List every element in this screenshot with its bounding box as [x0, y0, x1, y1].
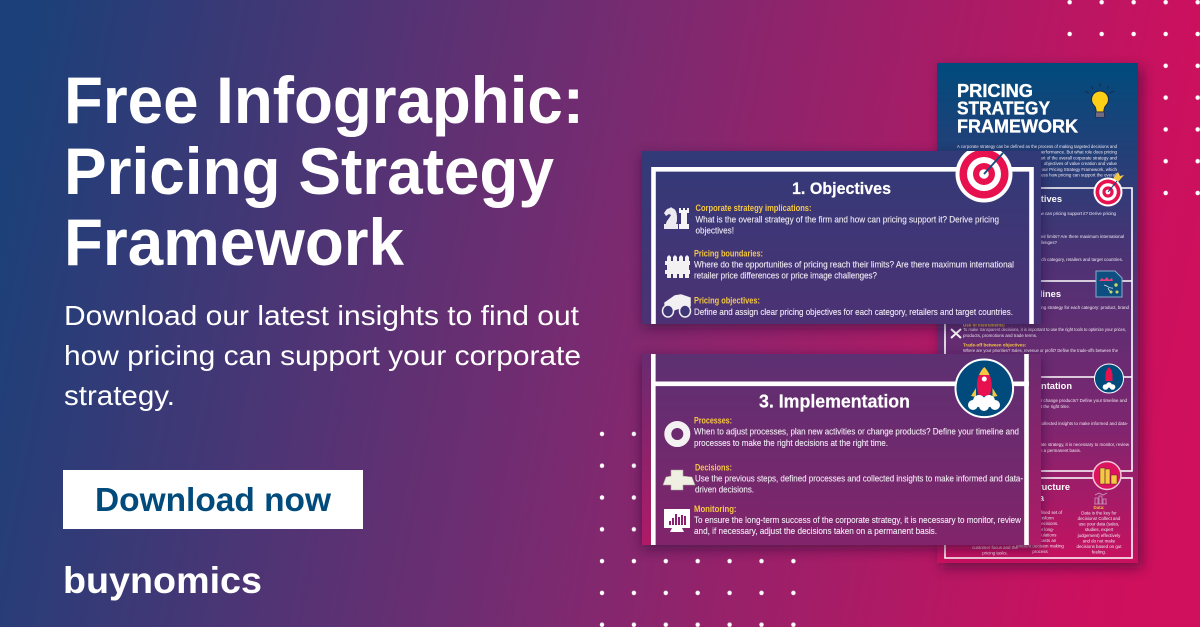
- column: data: Data:: [1094, 505, 1105, 510]
- column: customer: customer focus and the: [972, 545, 1018, 550]
- column: data: use your data (sales,: [1079, 522, 1119, 527]
- column: KPIs: Short- or long-: [1026, 527, 1055, 532]
- column: customer: pricing tasks.: [982, 550, 1008, 556]
- document title: PRICING: [957, 80, 1033, 101]
- section text in document: products, promotions and trade terms.: [963, 333, 1037, 338]
- item: decisions: driven decisions.: [695, 484, 754, 494]
- main heading: Free Infographic:: [64, 63, 584, 137]
- item: pricing objectives: [694, 296, 1013, 317]
- section text in document: To make transparent decisions, it is important to use the right tools to optimize your prices,: [963, 327, 1126, 332]
- section text in document: relevant KPIs.: [963, 354, 990, 359]
- section headings in document: Infrastructure: [1010, 482, 1070, 492]
- section headings in document: [1003, 194, 1072, 503]
- column: data: judgement) effectively: [1077, 533, 1121, 538]
- item: pricing boundaries: Pricing boundaries:: [694, 249, 763, 259]
- column: data: [1077, 505, 1122, 555]
- section text in document: of the corporate strategy, it is necessary to monitor, review: [1016, 442, 1130, 447]
- column: data: Data is the key for: [1081, 510, 1117, 516]
- column: KPIs: efficient decision making: [1016, 544, 1064, 549]
- item: processes: Processes:: [694, 416, 732, 426]
- main heading: [64, 63, 584, 279]
- main heading: Pricing Strategy: [64, 134, 554, 208]
- intro paragraph: ess how pricing can support the overall: [1041, 172, 1117, 178]
- document frame: [945, 188, 1132, 558]
- icon: small target: [1094, 172, 1124, 206]
- icon: map: [1096, 271, 1122, 297]
- icon: chess pieces: [664, 207, 689, 229]
- item: decisions: Decisions:: [695, 462, 732, 472]
- tools icon in document: [951, 329, 961, 338]
- icon: target: [956, 146, 1012, 202]
- tall infographic document: [937, 63, 1142, 568]
- download button: Download now: [95, 481, 331, 518]
- sub-heading text: how pricing can support your corporate: [64, 340, 581, 371]
- yellow sublabels in document: [963, 322, 1027, 348]
- item: decisions: [695, 462, 1023, 494]
- icon: fence: [665, 255, 690, 278]
- section text in document: plan new activities or change products? Define your timeline and: [1002, 398, 1128, 403]
- icon: monitor chart: [664, 509, 690, 532]
- intro paragraph: performance. But what role does pricing: [1039, 150, 1118, 155]
- panel frame: [651, 354, 1029, 545]
- item: monitoring: To ensure the long-term success of the corporate strategy, it is necessary to monitor, review: [694, 515, 1021, 525]
- item: corporate strategy: What is the overall strategy of the firm and how can pricing support it? Derive pricing: [696, 214, 999, 224]
- intro paragraph: [957, 144, 1118, 178]
- icon: small rocket: [1094, 364, 1124, 393]
- icon: binoculars: [662, 295, 690, 317]
- item: processes: processes to make the right decisions at the right time.: [694, 438, 888, 448]
- icon: rocket: [956, 360, 1013, 417]
- icon: data chart: [1094, 493, 1107, 504]
- icon: process ring: [668, 424, 687, 444]
- item: monitoring: and, if necessary, adjust the decisions taken on a permanent basis.: [694, 526, 937, 536]
- intro paragraph: objectives of value creation and value: [1044, 161, 1118, 166]
- section headings in document: Implementation: [1003, 381, 1072, 391]
- column: data: feeling.: [1092, 550, 1106, 555]
- icon: road crossing: [663, 470, 695, 490]
- dot pattern: top right: [1054, 0, 1200, 209]
- section headings in document: Objectives: [1015, 194, 1062, 204]
- column: KPIs: [1016, 510, 1064, 554]
- column: KPIs: and forecasts an: [1024, 538, 1057, 543]
- sub-heading text: strategy.: [64, 380, 175, 411]
- item: corporate strategy: [696, 203, 999, 235]
- sub-heading text: Download our latest insights to find out: [64, 300, 579, 331]
- column: data: and do not make: [1083, 538, 1116, 543]
- column: KPIs: KPIs to inform: [1026, 516, 1054, 521]
- section headings in document: & Data: [1015, 493, 1045, 503]
- section text in document: the decisions on a permanent basis.: [1011, 448, 1081, 453]
- section text in document: challenges?: [1034, 240, 1058, 245]
- item: corporate strategy: Corporate strategy implications:: [696, 203, 812, 213]
- section text in document: What is the overall strategy and how can pricing support it? Derive pricing: [973, 211, 1117, 216]
- section text in document: defined processes and collected insights to make informed and data-: [994, 421, 1129, 426]
- item: pricing boundaries: retailer price differences or price image challenges?: [694, 271, 877, 281]
- column: data: studies, expert: [1085, 527, 1114, 532]
- section text in document: reach their limits? Are there maximum international: [1025, 234, 1124, 239]
- column: KPIs: process: [1032, 549, 1048, 554]
- item: pricing objectives: Pricing objectives:: [694, 296, 760, 306]
- section text in document: [963, 211, 1130, 453]
- panel: 3. Implementation: [642, 354, 1041, 549]
- panel frame: [654, 169, 1032, 324]
- column: KPIs: term calculations: [1024, 532, 1057, 537]
- item: pricing objectives: Define and assign clear pricing objectives for each category, retailers and target countries.: [694, 307, 1013, 317]
- buynomics logo: buynomics: [63, 560, 262, 601]
- section text in document: the pricing strategy for each category: product, brand: [1026, 305, 1130, 310]
- item: pricing boundaries: Where do the opportunities of pricing reach their limits? Are there maximum international: [694, 260, 1014, 270]
- main heading: Framework: [64, 205, 404, 279]
- document title: STRATEGY: [957, 98, 1051, 118]
- section text in document: objectives for each category, retailers and target countries.: [1009, 257, 1123, 262]
- download button: [63, 470, 363, 529]
- panel heading: 3. Implementation: [759, 392, 910, 412]
- dot pattern: bottom centre: [586, 418, 809, 627]
- section text in document: at the right time.: [1039, 404, 1070, 409]
- item: monitoring: Monitoring:: [694, 504, 736, 514]
- section headings in document: Guidelines: [1013, 289, 1061, 299]
- item: decisions: Use the previous steps, defined processes and collected insights to make informed and data-: [695, 473, 1023, 483]
- column: KPIs: A clearly defined set of: [1018, 510, 1063, 515]
- item: corporate strategy: objectives!: [696, 225, 734, 235]
- item: monitoring: [694, 504, 1021, 536]
- item: processes: When to adjust processes, plan new activities or change products? Define your timeline and: [694, 427, 1019, 437]
- item: pricing boundaries: [694, 249, 1014, 281]
- document title: FRAMEWORK: [957, 116, 1079, 136]
- yellow sublabels in document: Use of instruments:: [963, 322, 1006, 328]
- document title: [957, 80, 1079, 136]
- icon: light bulb: [1085, 83, 1114, 118]
- intro paragraph: our Pricing Strategy Framework, which: [1042, 167, 1118, 172]
- column: customer: [972, 545, 1018, 556]
- column: data: decisions based on gut: [1077, 544, 1122, 549]
- column: KPIs: data-led decisions.: [1022, 521, 1058, 526]
- sub-heading text: [64, 300, 581, 411]
- intro paragraph: A corporate strategy can be defined as the process of making targeted decisions and: [957, 144, 1118, 149]
- panel heading: 1. Objectives: [792, 180, 891, 198]
- yellow sublabels in document: Trade-off between objectives:: [963, 342, 1027, 348]
- item: processes: [694, 416, 1019, 448]
- column: data: decisions! Collect and: [1078, 516, 1121, 521]
- intro paragraph: part of the overall corporate strategy and: [1038, 155, 1118, 160]
- panel: 1. Objectives: [642, 146, 1041, 328]
- icon: yellow buildings: [1093, 462, 1121, 490]
- section text in document: Where are your priorities? Sales, revenue or profit? Define the trade-offs between the: [963, 348, 1119, 353]
